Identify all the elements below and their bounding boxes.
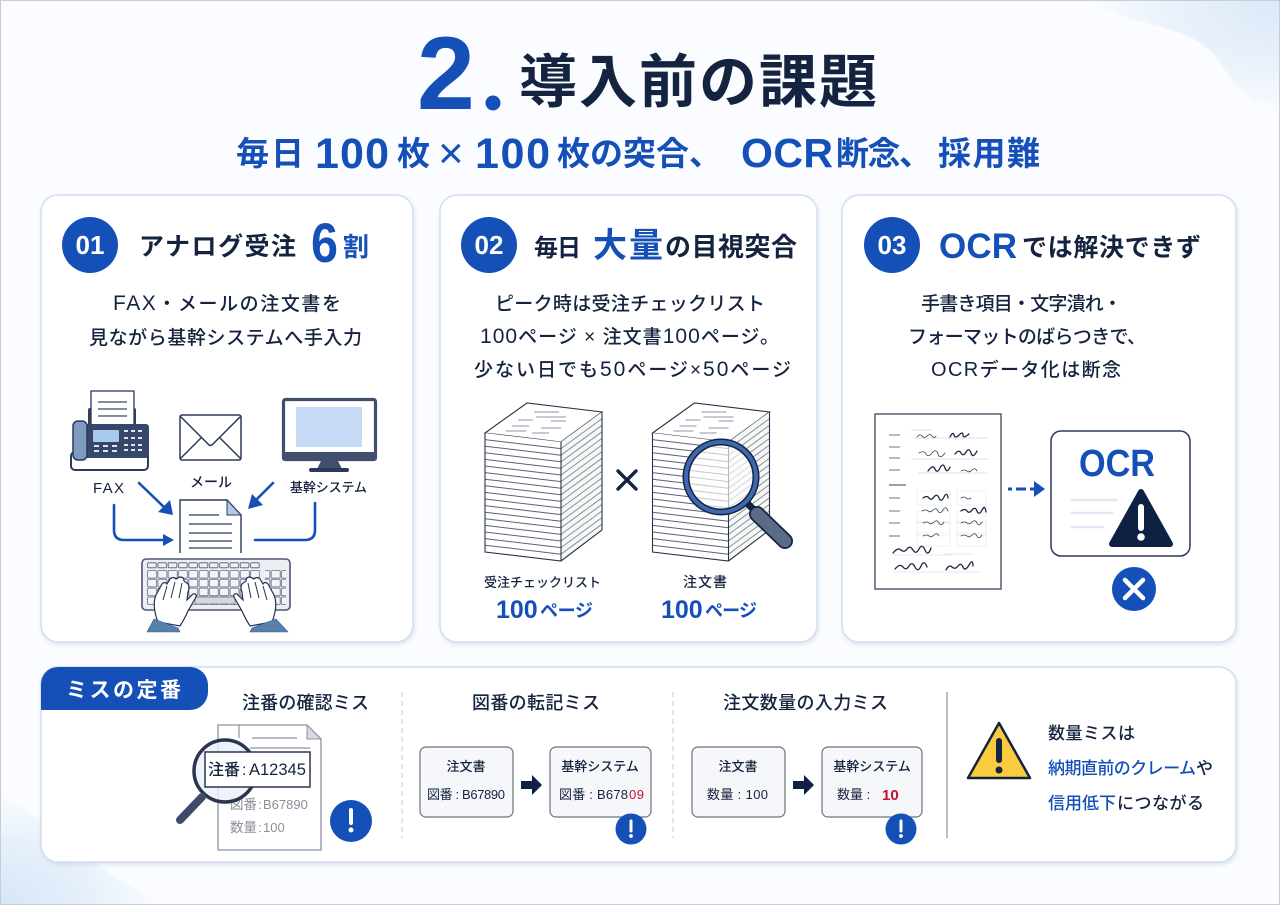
box: order form 2 — [420, 747, 513, 817]
subtitle: 毎日 — [236, 135, 304, 172]
box: order form 3: 注文書 — [718, 759, 758, 774]
body text 03 — [908, 293, 1146, 381]
icon: document with magnifier: B67890 — [263, 797, 308, 812]
box: order form 2: 図番 : B67890 — [427, 787, 505, 802]
callout: consequence text: 信用低下 — [1048, 794, 1116, 813]
arrow: dashed to OCR — [1008, 481, 1045, 497]
arrow 2 — [521, 775, 542, 795]
mistake 1 heading: 注番の確認ミス — [242, 693, 369, 713]
left hand — [147, 577, 196, 632]
heading 01: 6 — [311, 211, 338, 274]
badge 03: 03 — [878, 230, 906, 260]
heading 02: 大量 — [593, 227, 663, 265]
subtitle: × — [438, 129, 464, 178]
icon: document with magnifier: 注番 — [208, 761, 240, 779]
box: system 2 — [550, 747, 651, 817]
labels: sources — [93, 474, 367, 497]
heading 01: アナログ受注 — [139, 232, 296, 261]
heading 03: OCR — [939, 227, 1017, 266]
arrows: into document — [114, 483, 315, 546]
icon: document with magnifier — [180, 725, 321, 850]
body text 03: OCRデータ化は断念 — [931, 358, 1121, 381]
box: order form 3 — [692, 747, 785, 817]
subtitle: 100 — [315, 130, 389, 178]
body text 01 — [89, 292, 362, 349]
panel: common mistakes — [41, 667, 1236, 862]
callout: consequence text: 納期直前のクレーム — [1048, 759, 1196, 778]
box: system 2: 基幹システム — [561, 759, 639, 774]
icon: monitor — [282, 400, 377, 472]
badge 01: 01 — [76, 230, 104, 260]
body text 02 — [474, 293, 791, 381]
icon: envelope — [180, 415, 241, 460]
icon: alert 1 — [330, 800, 372, 842]
box: order form 3: 数量 : 100 — [707, 787, 768, 802]
subtitle: OCR — [741, 130, 833, 176]
labels: stacks: 注文書 — [683, 574, 727, 590]
callout: consequence text: につながる — [1117, 793, 1204, 813]
icon: alert 2 — [616, 814, 646, 844]
icon: document with magnifier: : — [258, 820, 262, 835]
panel: 01 analog orders — [41, 195, 413, 642]
heading 03 — [939, 227, 1201, 266]
icon: document with magnifier: 100 — [263, 820, 285, 835]
badge 02: 02 — [475, 230, 503, 260]
icon: warning yellow — [968, 723, 1030, 778]
badge 02 — [461, 217, 517, 273]
icon: document with magnifier: 図番 — [230, 797, 257, 812]
body text 02: ピーク時は受注チェックリスト — [495, 293, 765, 315]
labels: sources: FAX — [93, 480, 124, 497]
icon: document with magnifier: 数量 — [230, 820, 257, 835]
body text 01: FAX・メールの注文書を — [113, 292, 341, 315]
body text 02: 少ない日でも50ページ×50ページ — [474, 358, 791, 381]
OCR box: OCR — [1079, 443, 1155, 485]
body text 03: 手書き項目・文字潰れ・ — [921, 293, 1122, 315]
subtitle: 採用難 — [938, 135, 1040, 172]
icon: document with magnifier: : — [258, 797, 262, 812]
badge 03 — [864, 217, 920, 273]
icon: paper stack left — [485, 403, 602, 561]
icon: keyboard and hands — [142, 559, 290, 632]
callout: consequence text: 数量ミスは — [1048, 724, 1135, 743]
mistake 3 heading: 注文数量の入力ミス — [723, 693, 888, 713]
tab: mistakes label — [41, 667, 208, 710]
labels: stacks: 受注チェックリスト — [484, 575, 601, 590]
panel: 02 daily visual matching — [440, 195, 817, 642]
subtitle: 断念、 — [836, 135, 932, 172]
labels: sources: メール — [190, 474, 232, 490]
heading 02 — [534, 227, 797, 265]
OCR box — [1051, 431, 1190, 556]
badge 01 — [62, 217, 118, 273]
right hand — [234, 577, 288, 632]
heading 01: 割 — [343, 232, 369, 262]
icon: document with magnifier: A12345 — [249, 761, 306, 779]
mistake 2 heading: 図番の転記ミス — [472, 693, 600, 713]
icon: document — [180, 500, 241, 553]
subtitle: 枚 — [397, 135, 430, 172]
box: order form 2: 注文書 — [446, 759, 486, 774]
arrow 3 — [793, 775, 814, 795]
subtitle — [236, 129, 1040, 178]
icon: paper stack right with magnifier — [652, 403, 785, 561]
body text 03: フォーマットのばらつきで、 — [908, 326, 1146, 348]
title: 2 — [417, 16, 475, 132]
body text 02: 100ページ × 注文書100ページ。 — [480, 325, 779, 348]
tab: mistakes label: ミスの定番 — [66, 679, 181, 702]
labels: sources: 基幹システム — [290, 480, 367, 495]
box: system 2: 09 — [629, 787, 644, 802]
box: system 2: 図番 : B678 — [559, 787, 628, 802]
heading 01 — [139, 211, 369, 274]
title — [417, 16, 877, 132]
body text 01: 見ながら基幹システムへ手入力 — [89, 327, 362, 349]
title: 導入前の課題 — [519, 50, 877, 115]
subtitle: 100 — [475, 130, 550, 178]
box: system 3 — [822, 747, 922, 817]
callout: consequence text — [1048, 724, 1213, 813]
icon: handwritten form — [875, 414, 1001, 589]
labels: stacks: ページ — [540, 601, 593, 621]
labels: stacks: 100 — [661, 596, 703, 624]
icon: warning dark — [1112, 492, 1170, 544]
callout: consequence text: や — [1196, 759, 1213, 778]
icon: fax — [71, 391, 149, 470]
subtitle: 枚の突合、 — [557, 135, 722, 172]
panel: 03 OCR not a solution — [842, 195, 1236, 642]
box: system 3: 数量 : — [837, 787, 870, 802]
icon: cross circle — [1112, 567, 1156, 611]
icon: document with magnifier: : — [242, 762, 246, 779]
icon: alert 3 — [886, 814, 916, 844]
labels: stacks: 100 — [496, 596, 538, 624]
box: system 3: 基幹システム — [833, 759, 911, 774]
box: system 3: 10 — [882, 787, 899, 804]
multiply sign — [618, 471, 636, 489]
heading 03: では解決できず — [1022, 234, 1201, 262]
labels: stacks — [484, 574, 757, 624]
heading 02: の目視突合 — [665, 232, 797, 262]
labels: stacks: ページ — [705, 601, 757, 621]
heading 02: 毎日 — [534, 235, 581, 262]
